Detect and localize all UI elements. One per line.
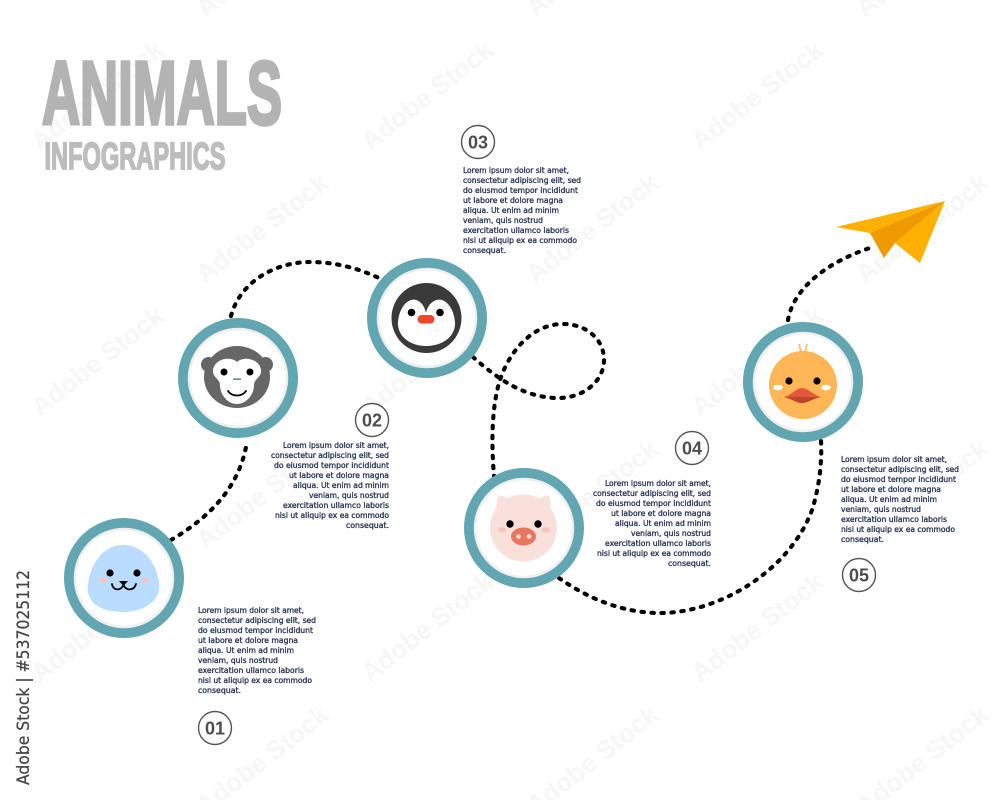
text block 05: nisi ut aliquip ex ea commodo: [841, 525, 955, 534]
text block 03: consequat.: [463, 246, 506, 255]
text block 02: [271, 441, 389, 530]
text block 04: exercitation ullamco laboris: [605, 539, 711, 548]
text block 05: aliqua. Ut enim ad minim: [841, 495, 937, 504]
number badge 02: [356, 404, 388, 436]
text block 04: aliqua. Ut enim ad minim: [615, 519, 711, 528]
text block 04: ut labore et dolore magna: [611, 509, 711, 518]
subheading: INFOGRAPHICS: INFOGRAPHICS: [44, 136, 226, 178]
text block 01: consequat.: [198, 686, 241, 695]
stock image id: Adobe Stock | #537025112: [14, 570, 34, 785]
route: monkey to penguin: [231, 262, 381, 316]
icon: duck: [748, 327, 858, 437]
text block 05: consequat.: [841, 535, 884, 544]
text block 03: nisi ut aliquip ex ea commodo: [463, 236, 577, 245]
text block 05: veniam, quis nostrud: [841, 505, 921, 514]
text block 04: consectetur adipiscing elit, sed: [593, 489, 711, 498]
title: [42, 44, 282, 178]
text block 03: aliqua. Ut enim ad minim: [463, 206, 559, 215]
text block 01: consectetur adipiscing elit, sed: [198, 616, 316, 625]
text block 01: Lorem ipsum dolor sit amet,: [198, 606, 304, 615]
text block 04: veniam, quis nostrud: [631, 529, 711, 538]
icon: seal: [69, 523, 179, 633]
route: seal to monkey: [171, 441, 247, 540]
text block 03: consectetur adipiscing elit, sed: [463, 176, 581, 185]
text block 04: Lorem ipsum dolor sit amet,: [605, 479, 711, 488]
heading: ANIMALS: ANIMALS: [42, 44, 282, 144]
number badge 02: 02: [362, 410, 382, 430]
number badge 05: [842, 558, 876, 592]
number badge 01: 01: [205, 718, 225, 738]
text block 01: aliqua. Ut enim ad minim: [198, 646, 294, 655]
text block 04: [593, 479, 711, 568]
icon: pig: [469, 473, 579, 583]
text block 01: do eiusmod tempor incididunt: [198, 626, 313, 635]
number badge 01: [198, 712, 232, 744]
number badge 03: 03: [468, 132, 488, 152]
route: duck to plane: [788, 247, 873, 320]
icon: paper plane: [836, 201, 945, 263]
text block 02: ut labore et dolore magna: [289, 471, 389, 480]
text block 05: ut labore et dolore magna: [841, 485, 941, 494]
text block 03: do eiusmod tempor incididunt: [463, 186, 578, 195]
text block 01: [198, 606, 316, 695]
text block 05: [841, 455, 959, 544]
text block 02: consectetur adipiscing elit, sed: [271, 451, 389, 460]
text block 01: veniam, quis nostrud: [198, 656, 278, 665]
text block 05: Lorem ipsum dolor sit amet,: [841, 455, 947, 464]
number badge 04: 04: [682, 438, 702, 458]
text block 01: exercitation ullamco laboris: [198, 666, 304, 675]
text block 04: consequat.: [668, 559, 711, 568]
text block 02: consequat.: [346, 521, 389, 530]
text block 02: exercitation ullamco laboris: [283, 501, 389, 510]
text block 02: Lorem ipsum dolor sit amet,: [283, 441, 389, 450]
text block 04: do eiusmod tempor incididunt: [596, 499, 711, 508]
text block 05: consectetur adipiscing elit, sed: [841, 465, 959, 474]
text block 02: aliqua. Ut enim ad minim: [293, 481, 389, 490]
text block 01: nisi ut aliquip ex ea commodo: [198, 676, 312, 685]
number badge 05: 05: [849, 566, 869, 586]
icon: penguin: [372, 263, 482, 373]
text block 04: nisi ut aliquip ex ea commodo: [597, 549, 711, 558]
text block 03: ut labore et dolore magna: [463, 196, 563, 205]
number badge 04: [676, 432, 708, 464]
text block 05: exercitation ullamco laboris: [841, 515, 947, 524]
text block 05: do eiusmod tempor incididunt: [841, 475, 956, 484]
text block 03: [463, 166, 581, 255]
text block 03: exercitation ullamco laboris: [463, 226, 569, 235]
text block 02: do eiusmod tempor incididunt: [274, 461, 389, 470]
text block 03: veniam, quis nostrud: [463, 216, 543, 225]
icon: monkey: [183, 323, 293, 433]
text block 01: ut labore et dolore magna: [198, 636, 298, 645]
route: penguin loop to pig: [473, 324, 604, 476]
text block 02: nisi ut aliquip ex ea commodo: [275, 511, 389, 520]
dashed route: [171, 247, 873, 613]
text block 02: veniam, quis nostrud: [309, 491, 389, 500]
route: pig to duck: [559, 440, 821, 613]
number badge 03: [462, 126, 494, 158]
text block 03: Lorem ipsum dolor sit amet,: [463, 166, 569, 175]
